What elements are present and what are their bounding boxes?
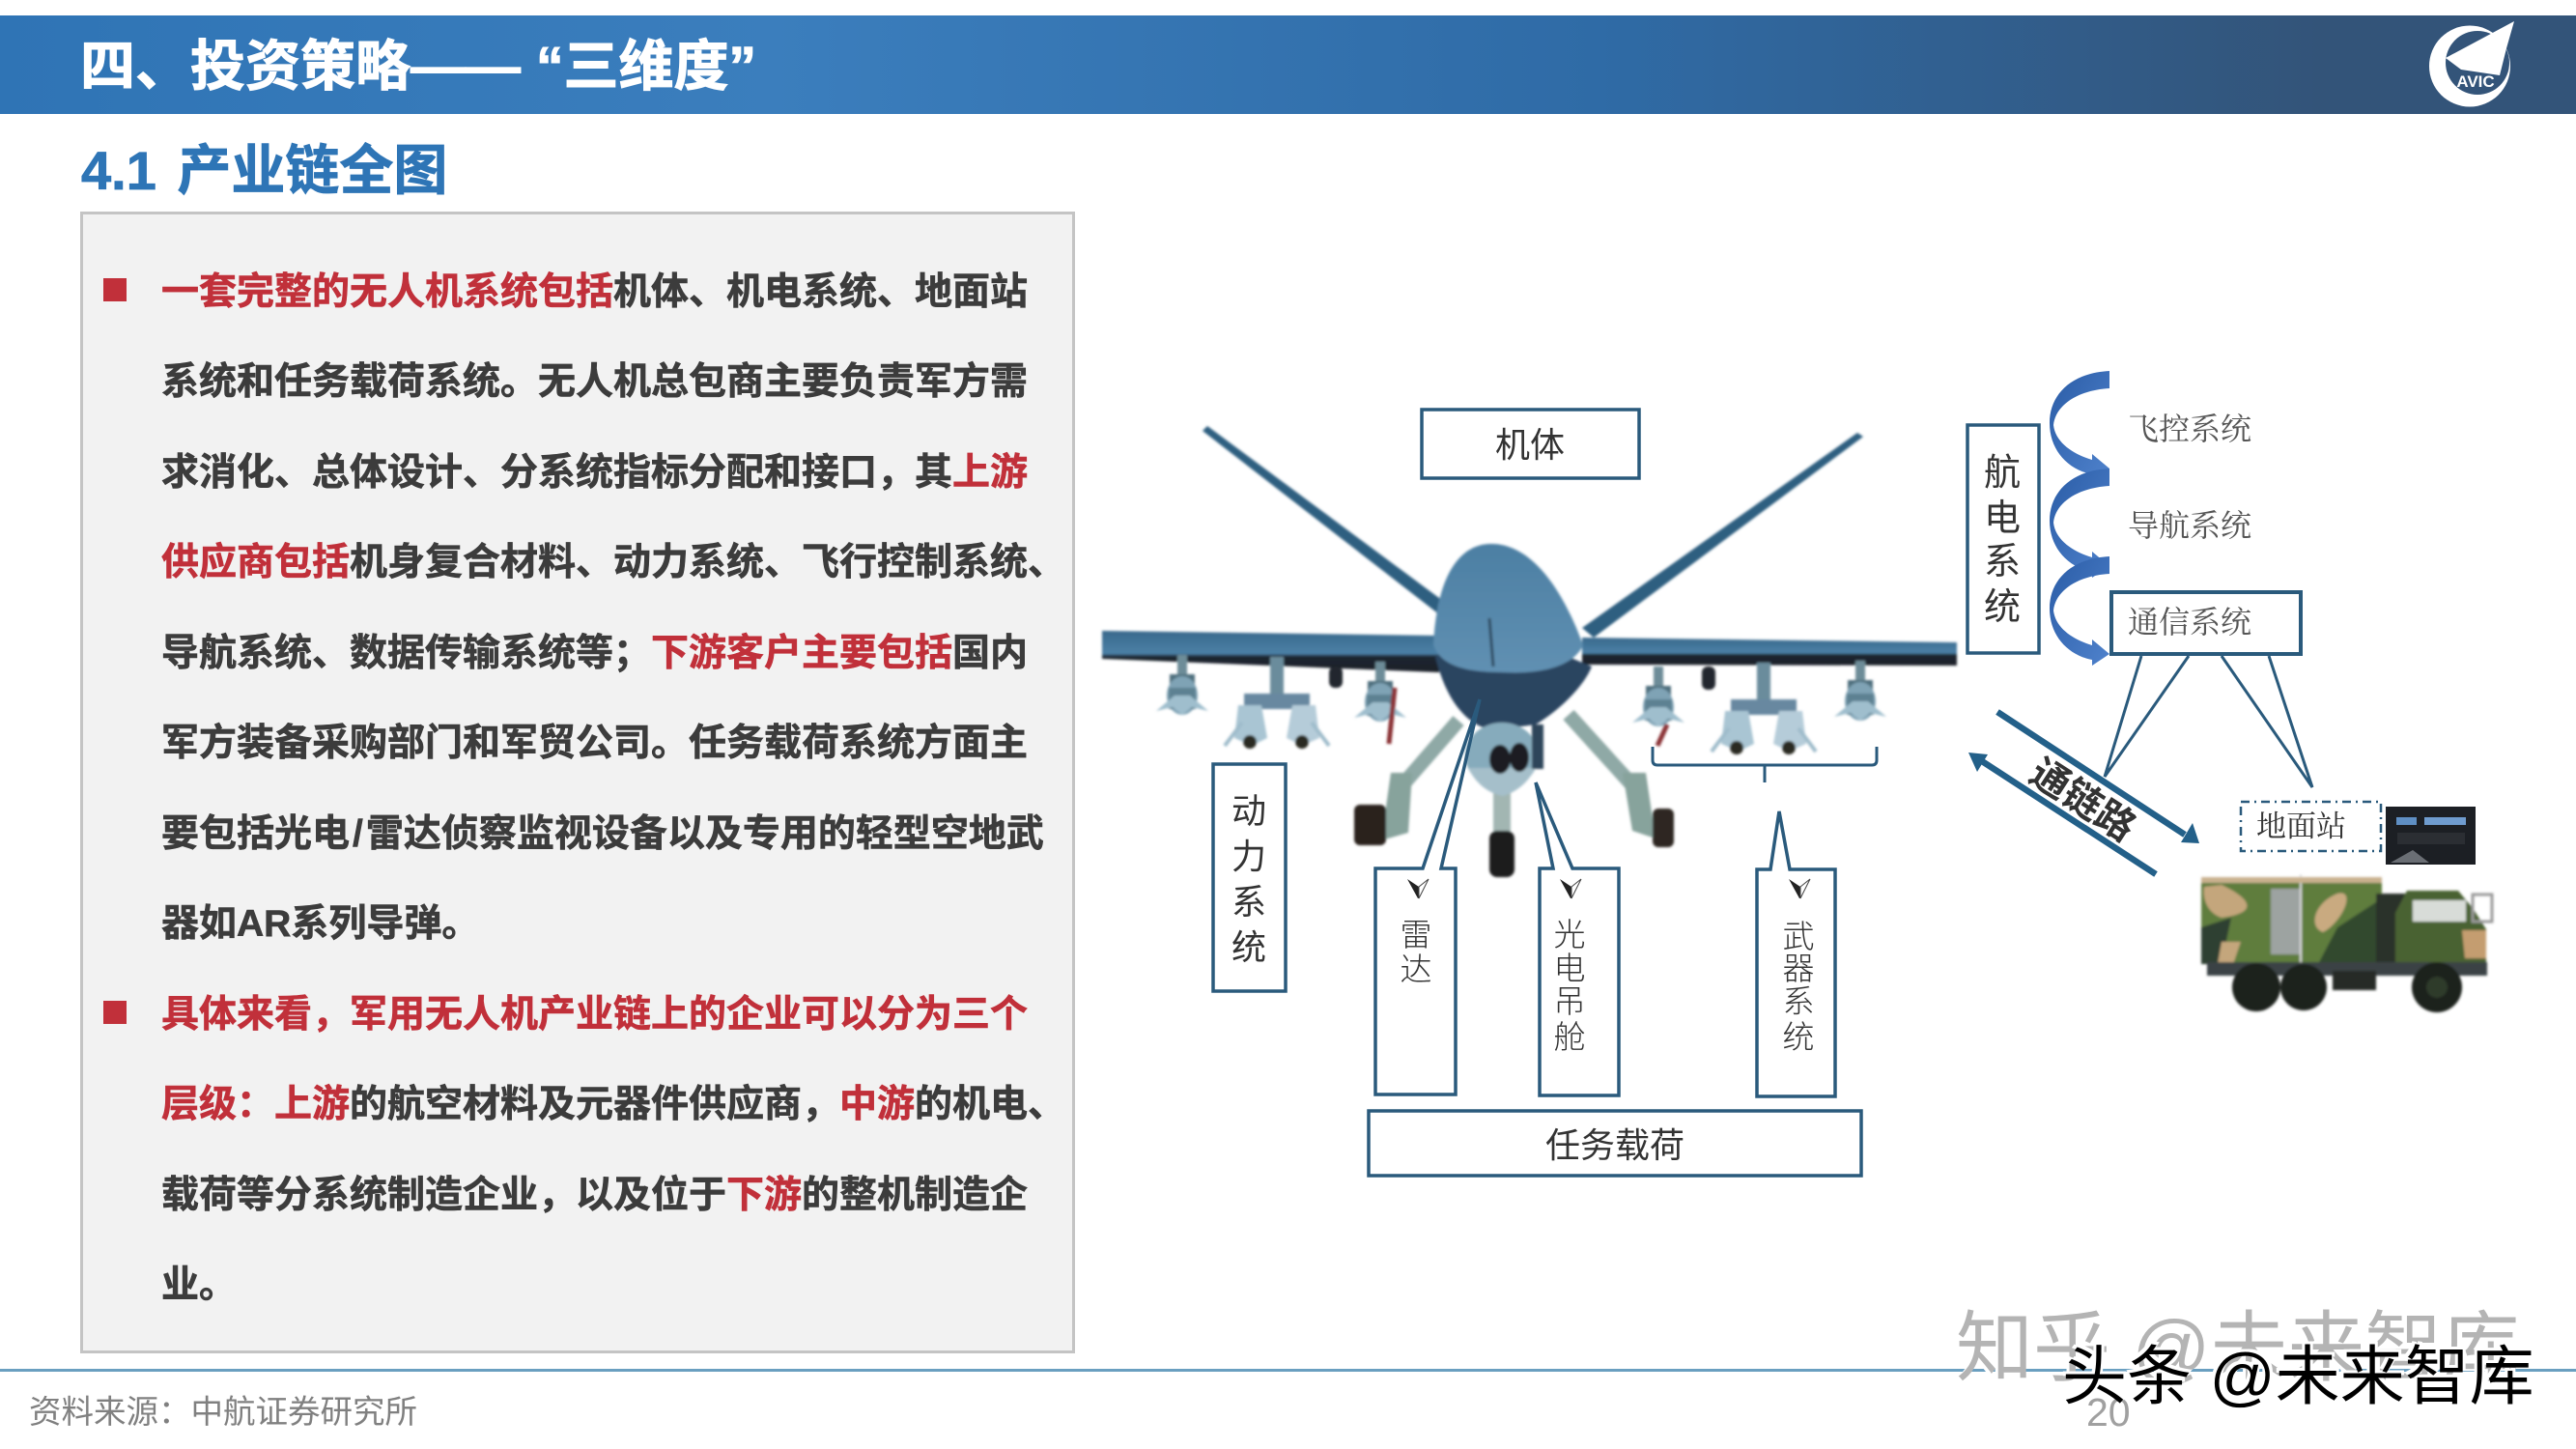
source note: 资料来源：中航证券研究所 <box>29 1395 417 1431</box>
box: ground station <box>2241 802 2381 851</box>
paragraph 1: 导航系统、数据传输系统等；下游客户主要包括国内 <box>161 633 1028 674</box>
page number: 20 <box>2086 1390 2131 1435</box>
paragraph 1: 系统和任务载荷系统。无人机总包商主要负责军方需 <box>161 361 1028 403</box>
drone landing gear <box>1354 715 1674 877</box>
arrow: uplink <box>1968 753 2156 874</box>
paragraph 1: 供应商包括机身复合材料、动力系统、飞行控制系统、 <box>161 542 1065 583</box>
callout: weapon system: 器 <box>1783 943 1814 989</box>
label: flight control system: 飞控系统 <box>2128 405 2251 449</box>
icon: direction arrow <box>1407 879 1429 898</box>
image: control room <box>2386 807 2476 865</box>
paragraph 1: 器如AR系列导弹。 <box>161 903 479 945</box>
box: avionics system: 系 <box>1984 542 2021 582</box>
box: power system: 动 <box>1231 791 1266 831</box>
callout: EO pod: 吊 <box>1553 976 1586 1022</box>
box: power system: 力 <box>1231 837 1266 876</box>
callout: weapon system: 武 <box>1783 911 1814 957</box>
paragraph 2: 层级：上游的航空材料及元器件供应商，中游的机电、 <box>161 1084 1065 1125</box>
paragraph 1 <box>161 270 1065 945</box>
callout: EO pod <box>1536 782 1619 1095</box>
paragraph 1: 一套完整的无人机系统包括机体、机电系统、地面站 <box>161 271 1028 313</box>
arrow: downlink <box>1997 712 2199 843</box>
callout: radar: 达 <box>1401 944 1431 990</box>
footer rule <box>0 1369 2576 1372</box>
paragraph 2: 具体来看，军用无人机产业链上的企业可以分为三个 <box>161 994 1028 1036</box>
paragraph 1: 军方装备采购部门和军贸公司。任务载荷系统方面主 <box>161 723 1028 764</box>
box: avionics system: 航 <box>1984 453 2021 494</box>
drone V tail <box>1203 426 1863 638</box>
box: power system <box>1213 764 1286 991</box>
panel: text description <box>80 212 1075 1353</box>
box: communication system <box>2111 592 2301 654</box>
truck cab <box>2376 891 2492 963</box>
box: power system: 统 <box>1231 927 1266 967</box>
image: drone <box>1102 426 1957 877</box>
callout: weapon system: 统 <box>1783 1011 1814 1058</box>
label: navigation system: 导航系统 <box>2128 501 2251 546</box>
box: mission payload: 任务载荷 <box>1545 1125 1684 1165</box>
callout lines: ground station <box>2222 656 2312 787</box>
icon: direction arrow <box>1789 879 1810 898</box>
curved arrows <box>2050 371 2109 666</box>
paragraph 2: 业。 <box>161 1264 237 1306</box>
callout: weapon system <box>1757 811 1835 1096</box>
box: airframe: 机体 <box>1495 425 1565 465</box>
paragraph 1: 求消化、总体设计、分系统指标分配和接口，其上游 <box>161 452 1028 494</box>
box: ground station: 地面站 <box>2256 802 2346 845</box>
title: 四、投资策略—— “三维度” <box>80 36 756 98</box>
watermark: zhihu: 知乎 @未来智库 <box>1956 1305 2519 1391</box>
callout: EO pod: 舱 <box>1553 1011 1586 1058</box>
label: datalink: 通链路 <box>2023 752 2142 850</box>
logo: AVIC: AVIC <box>2456 72 2495 91</box>
header bar <box>0 15 2576 114</box>
callout: radar <box>1375 699 1480 1094</box>
box: airframe <box>1422 410 1639 478</box>
callout: weapon system: 系 <box>1783 976 1814 1022</box>
image: ground station truck <box>2201 874 2492 1012</box>
truck cargo box <box>2201 874 2382 964</box>
drone weapon pylons <box>1156 655 1886 754</box>
logo: AVIC <box>2429 21 2514 106</box>
bullet 2 <box>103 1001 127 1024</box>
box: avionics system <box>1967 425 2039 653</box>
callout: EO pod: 电 <box>1553 943 1586 989</box>
callout: radar: 雷 <box>1401 909 1431 955</box>
callout lines: datalink <box>2105 656 2189 777</box>
icon: direction arrow <box>1560 879 1581 898</box>
watermark: toutiao: 头条 @未来智库 <box>2062 1341 2534 1413</box>
drone sensor ball <box>1465 723 1543 796</box>
callout: EO pod: 光 <box>1553 909 1586 955</box>
paragraph 2: 载荷等分系统制造企业，以及位于下游的整机制造企 <box>161 1175 1028 1216</box>
drone fuselage <box>1433 544 1592 730</box>
drone wings <box>1102 631 1957 672</box>
truck chassis and wheels <box>2207 962 2487 1012</box>
box: avionics system: 统 <box>1984 587 2021 628</box>
box: avionics system: 电 <box>1984 498 2021 539</box>
bullet 1 <box>103 278 127 301</box>
paragraph 2 <box>161 993 1065 1306</box>
paragraph 1: 要包括光电/雷达侦察监视设备以及专用的轻型空地武 <box>161 813 1044 855</box>
box: communication system: 通信系统 <box>2128 598 2251 642</box>
box: power system: 系 <box>1231 882 1266 922</box>
brace: weapons <box>1653 747 1877 782</box>
subtitle: 4.1 产业链全图 <box>81 140 447 201</box>
box: mission payload <box>1369 1111 1861 1176</box>
